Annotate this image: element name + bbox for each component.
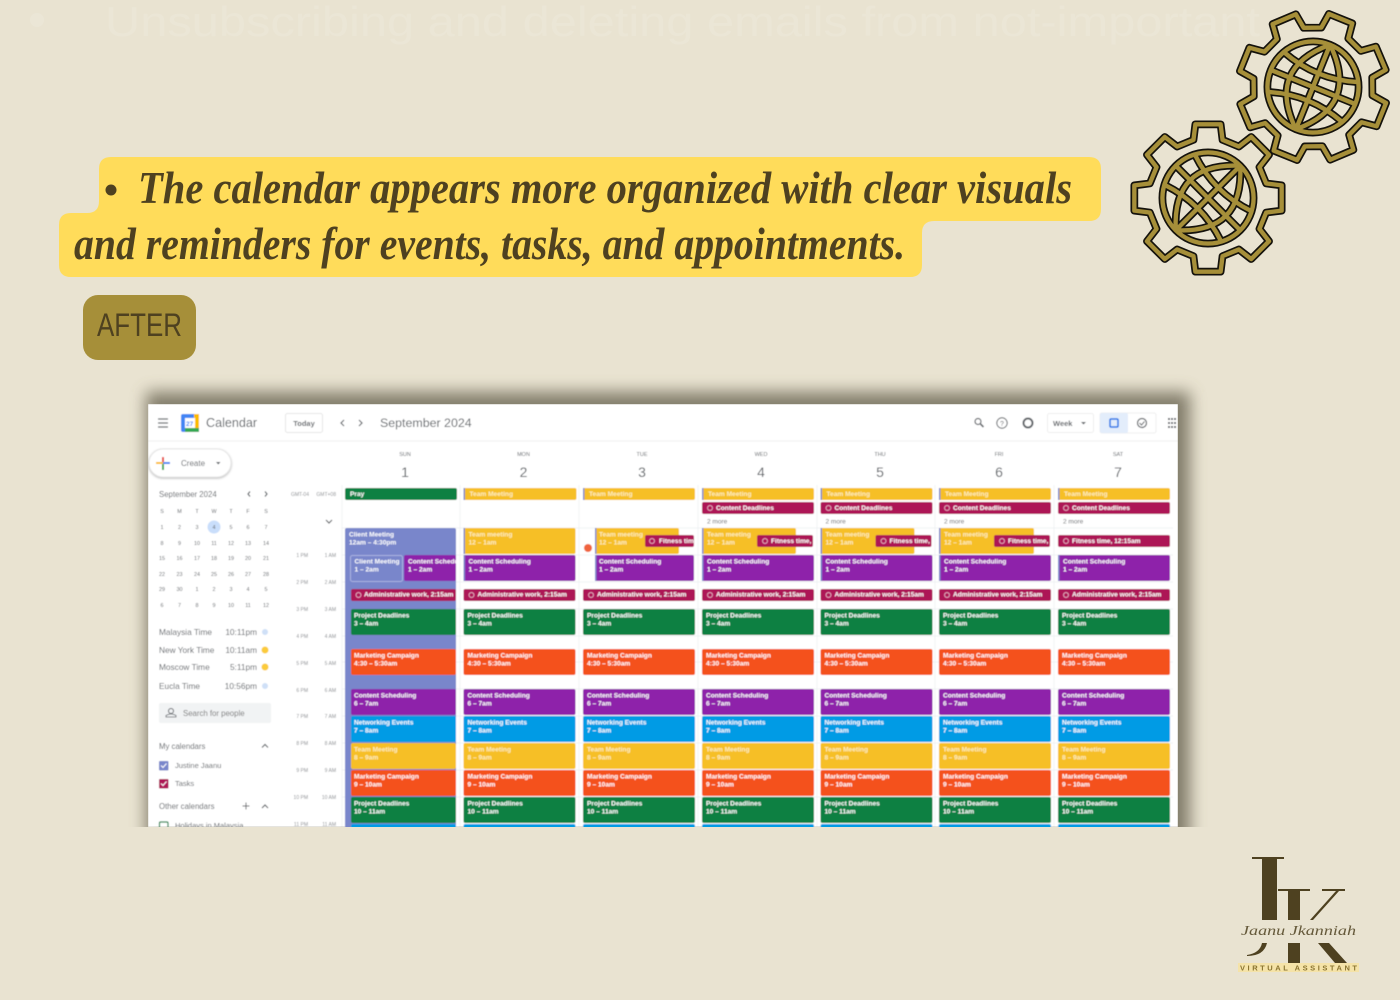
column: Thursday: Fitness time,: [890, 538, 930, 545]
time axis: 3 PM: [296, 607, 308, 613]
column: Wednesday: [702, 488, 814, 830]
AFTER badge: [83, 295, 196, 360]
my calendars list: My calendars: [159, 742, 205, 751]
mini month calendar: S: [160, 509, 164, 515]
search for people: Search for people: [183, 709, 245, 718]
column: Monday: Project Deadlines: [468, 612, 523, 619]
time axis: 6 PM: [296, 688, 308, 694]
mini month calendar: 3: [230, 587, 232, 593]
my calendars list: Holidays in Malaysia: [175, 821, 244, 830]
column: Friday: Team Meeting: [943, 746, 986, 753]
mini month calendar: 11: [211, 541, 217, 547]
column: Sunday: Marketing Campaign: [354, 652, 419, 659]
world clocks: Moscow Time: [159, 662, 210, 672]
column: Wednesday: Marketing Campaign: [706, 773, 771, 780]
column: Thursday: 4:30 – 5:30am: [824, 660, 868, 667]
column: Tuesday: [583, 488, 699, 830]
column: Thursday: Team Meeting: [824, 746, 868, 753]
column: Monday: 8 – 9am: [468, 754, 492, 761]
column: Thursday: 8 – 9am: [824, 754, 849, 761]
column: Monday: Team Meeting: [468, 746, 511, 753]
column: Wednesday: 1 – 2am: [707, 566, 731, 573]
column: Tuesday: 12 – 1am: [599, 539, 627, 546]
time axis: 4 AM: [325, 634, 336, 640]
time axis: 2 PM: [296, 580, 308, 586]
day headers: 3: [638, 464, 646, 480]
my calendars list: Justine Jaanu: [175, 761, 221, 770]
day headers: WED: [755, 452, 767, 458]
column: Saturday: Team Meeting: [1062, 746, 1105, 753]
column: Sunday: 3 – 4am: [354, 620, 378, 627]
mini month calendar: 3: [196, 525, 198, 531]
time axis: 10 AM: [322, 795, 336, 801]
day headers: SAT: [1113, 452, 1124, 458]
column: Tuesday: Networking Events: [587, 719, 647, 726]
world clocks: 10:11pm: [225, 627, 257, 637]
icon: gear globe bottom left: [1104, 94, 1312, 302]
column: Sunday: [345, 488, 470, 830]
mini month calendar: 6: [160, 603, 164, 609]
mini month calendar: 6: [246, 525, 250, 531]
column: Tuesday: Team Meeting: [589, 491, 632, 498]
column: Friday: 12 – 1am: [944, 539, 972, 546]
time axis: 9 AM: [325, 768, 336, 774]
column: Tuesday: Project Deadlines: [587, 800, 643, 807]
my calendars list: Tasks: [175, 779, 194, 788]
column: Thursday: 12 – 1am: [826, 539, 853, 546]
column: Friday: Fitness time,: [1008, 538, 1048, 545]
mini month calendar: 8: [160, 541, 164, 547]
day headers: 6: [995, 464, 1003, 480]
column: Tuesday: 3 – 4am: [587, 620, 611, 627]
column: Saturday: Content Deadlines: [1072, 505, 1130, 512]
mini month calendar: 26: [228, 572, 234, 578]
day headers: [399, 452, 1124, 480]
mini month calendar: 14: [263, 541, 269, 547]
column: Friday: Content Scheduling: [943, 692, 1005, 699]
column: Sunday: Project Deadlines: [354, 612, 410, 619]
column: Thursday: Networking Events: [824, 719, 884, 726]
column: Friday: Team meeting: [944, 531, 988, 538]
column: Wednesday: Content Deadlines: [716, 505, 774, 512]
mini month calendar: 27: [245, 572, 251, 578]
column: Tuesday: Marketing Campaign: [587, 773, 652, 780]
mini month calendar: [159, 490, 269, 609]
logo: [1238, 857, 1359, 972]
column: Sunday: Pray: [350, 491, 365, 498]
mini month calendar: 19: [228, 556, 234, 562]
create button: Create: [181, 459, 206, 468]
day headers: TUE: [636, 452, 648, 458]
mini month calendar: 25: [211, 572, 217, 578]
logo tagline: VIRTUAL ASSISTANT: [1240, 964, 1357, 972]
column: Sunday: 1 – 2am: [354, 566, 379, 573]
time axis: 3 AM: [325, 607, 336, 613]
column: Wednesday: 4:30 – 5:30am: [706, 660, 749, 667]
world clocks: 10:11am: [225, 645, 257, 655]
column: Monday: 6 – 7am: [468, 700, 492, 707]
column: Sunday: Networking Events: [354, 719, 414, 726]
mini month calendar: 10: [228, 603, 234, 609]
world clocks: Malaysia Time: [159, 627, 212, 637]
mini month calendar: 17: [194, 556, 200, 562]
column: Friday: 1 – 2am: [944, 566, 968, 573]
my calendars list: [159, 742, 268, 831]
column: Monday: 3 – 4am: [468, 620, 492, 627]
world clocks: 10:56pm: [225, 681, 257, 691]
column: Sunday: Content Scheduling: [408, 558, 470, 565]
column: Saturday: 10 – 11am: [1062, 808, 1093, 815]
column: Sunday: Marketing Campaign: [354, 773, 419, 780]
logo mirrored monogram: [1247, 943, 1347, 963]
column: Sunday: 6 – 7am: [354, 700, 378, 707]
column: Saturday: Content Scheduling: [1063, 558, 1125, 565]
mini month calendar: 21: [263, 556, 269, 562]
time axis: 5 AM: [325, 661, 336, 667]
column: Tuesday: 1 – 2am: [599, 566, 623, 573]
mini month calendar: M: [177, 509, 182, 515]
column: Saturday: Project Deadlines: [1062, 612, 1118, 619]
column: Wednesday: 10 – 11am: [706, 808, 737, 815]
column: Saturday: [1058, 488, 1170, 830]
screenshot shadow: [146, 392, 1190, 872]
highlighted statement: [59, 157, 1101, 277]
column: Tuesday: 6 – 7am: [587, 700, 611, 707]
mini month calendar: 7: [264, 525, 268, 531]
day headers: THU: [874, 452, 886, 458]
column: Saturday: Administrative work, 2:15am: [1072, 592, 1162, 599]
column: Wednesday: 7 – 8am: [706, 727, 730, 734]
column: Sunday: 9 – 10am: [354, 781, 382, 788]
column: Thursday: 10 – 11am: [824, 808, 856, 815]
column: Wednesday: 12 – 1am: [707, 539, 735, 546]
calendar top bar: 27: [186, 421, 194, 428]
mini month calendar: 2: [178, 525, 181, 531]
column: Friday: 9 – 10am: [943, 781, 971, 788]
column: Wednesday: Team Meeting: [706, 746, 749, 753]
mini month calendar: 22: [159, 572, 165, 578]
column: Thursday: Marketing Campaign: [824, 652, 889, 659]
column: Monday: 12 – 1am: [468, 539, 496, 546]
column: Wednesday: Marketing Campaign: [706, 652, 771, 659]
column: Thursday: Content Deadlines: [834, 505, 893, 512]
column: Wednesday: Project Deadlines: [706, 612, 762, 619]
mini month calendar: 4: [212, 525, 216, 531]
column: Friday: Team Meeting: [945, 491, 988, 498]
column: Tuesday: Team meeting: [599, 531, 643, 538]
column: Friday: Content Scheduling: [944, 558, 1006, 565]
mini month calendar: W: [211, 509, 217, 515]
column: Wednesday: Networking Events: [706, 719, 766, 726]
column: Wednesday: 3 – 4am: [706, 620, 730, 627]
mini month calendar: 12: [263, 603, 269, 609]
column: Saturday: Content Scheduling: [1062, 692, 1124, 699]
column: Tuesday: 4:30 – 5:30am: [587, 660, 630, 667]
calendar top bar: Today: [293, 419, 316, 428]
column: Tuesday: Content Scheduling: [587, 692, 649, 699]
mini month calendar: 20: [245, 556, 251, 562]
time axis: 6 AM: [325, 688, 336, 694]
world clocks: 5:11pm: [230, 662, 257, 672]
column: Saturday: Networking Events: [1062, 719, 1122, 726]
mini month calendar: 7: [178, 603, 181, 609]
mini month calendar: 4: [246, 587, 250, 593]
column: Monday: Networking Events: [468, 719, 527, 726]
mini month calendar: T: [229, 509, 233, 515]
mini month calendar: 1: [160, 525, 164, 531]
time axis: 1 AM: [325, 553, 336, 559]
time axis: GMT+08: [316, 492, 336, 498]
time axis: 9 PM: [296, 768, 308, 774]
column: Wednesday: Fitness time,: [771, 538, 811, 545]
calendar top bar: ?: [1000, 421, 1004, 428]
column: Tuesday: Administrative work, 2:15am: [597, 592, 687, 599]
column: Tuesday: 10 – 11am: [587, 808, 618, 815]
time axis: 1 PM: [296, 553, 308, 559]
day headers: 4: [757, 464, 765, 480]
column: Saturday: 7 – 8am: [1062, 727, 1086, 734]
mini month calendar: 9: [212, 603, 216, 609]
mini month calendar: 28: [263, 572, 269, 578]
column: Tuesday: 9 – 10am: [587, 781, 615, 788]
mini month calendar: F: [246, 509, 250, 515]
mini month calendar: 16: [176, 556, 182, 562]
calendar screenshot: [148, 404, 1178, 831]
column: Monday: Project Deadlines: [468, 800, 523, 807]
mini month calendar: 5: [264, 587, 268, 593]
column: Thursday: 1 – 2am: [826, 566, 850, 573]
column: Saturday: 2 more: [1063, 518, 1084, 526]
time axis: [291, 492, 336, 828]
column: Monday: Content Scheduling: [468, 692, 530, 699]
column: Sunday: Team Meeting: [354, 746, 397, 753]
column: Wednesday: 8 – 9am: [706, 754, 730, 761]
mini month calendar: T: [195, 509, 199, 515]
highlighted statement: and reminders for events, tasks, and appointments.: [74, 219, 905, 269]
mini month calendar: 15: [159, 556, 165, 562]
column: Tuesday: Fitness time,: [659, 538, 699, 545]
time axis: 8 PM: [296, 741, 308, 747]
day headers: SUN: [399, 452, 411, 458]
column: Thursday: Team meeting: [826, 531, 869, 538]
column: Wednesday: 2 more: [707, 518, 728, 526]
calendar top bar: Calendar: [206, 416, 257, 430]
column: Tuesday: Content Scheduling: [599, 558, 661, 565]
mini month calendar: 30: [176, 587, 182, 593]
column: Saturday: Marketing Campaign: [1062, 652, 1127, 659]
column: Sunday: Administrative work, 2:15am: [364, 592, 454, 599]
column: Saturday: 6 – 7am: [1062, 700, 1086, 707]
column: Thursday: Project Deadlines: [824, 612, 880, 619]
mini month calendar: 29: [159, 587, 165, 593]
column: Sunday: 8 – 9am: [354, 754, 378, 761]
column: Saturday: 4:30 – 5:30am: [1062, 660, 1105, 667]
highlighted statement: The calendar appears more organized with clear visuals: [138, 163, 1072, 213]
mini month calendar: 2: [212, 587, 216, 593]
mini month calendar: 10: [194, 541, 200, 547]
calendar top bar: [148, 413, 1178, 441]
column: Wednesday: Project Deadlines: [706, 800, 762, 807]
column: Sunday: Content Scheduling: [354, 692, 416, 699]
day headers: FRI: [995, 452, 1004, 458]
column: Friday: Administrative work, 2:15am: [953, 592, 1043, 599]
column: Monday: 7 – 8am: [468, 727, 492, 734]
column: Tuesday: Team Meeting: [587, 746, 630, 753]
column: Thursday: 2 more: [826, 518, 846, 526]
column: Thursday: 6 – 7am: [824, 700, 849, 707]
mini month calendar: 23: [176, 572, 182, 578]
column: Thursday: Administrative work, 2:15am: [834, 592, 924, 599]
column: Thursday: Content Scheduling: [824, 692, 887, 699]
column: Sunday: 7 – 8am: [354, 727, 378, 734]
column: Saturday: Project Deadlines: [1062, 800, 1118, 807]
column: Monday: 1 – 2am: [468, 566, 493, 573]
column: Monday: Content Scheduling: [468, 558, 531, 565]
column: Sunday: 1 – 2am: [408, 566, 432, 573]
column: Saturday: 1 – 2am: [1063, 566, 1087, 573]
my calendars list: Other calendars: [159, 802, 215, 811]
search for people: [159, 703, 271, 723]
column: Friday: Project Deadlines: [943, 800, 999, 807]
column: Tuesday: Marketing Campaign: [587, 652, 652, 659]
column: Saturday: 3 – 4am: [1062, 620, 1086, 627]
column: Friday: 8 – 9am: [943, 754, 967, 761]
logo monogram K: [1278, 889, 1345, 920]
column: Friday: Marketing Campaign: [943, 773, 1008, 780]
day headers: 2: [520, 464, 528, 480]
mini month calendar: 13: [245, 541, 251, 547]
column: Tuesday: Project Deadlines: [587, 612, 643, 619]
day headers: MON: [517, 452, 530, 458]
column: Thursday: Team Meeting: [826, 491, 870, 498]
day headers: 1: [401, 464, 409, 480]
column: Friday: 4:30 – 5:30am: [943, 660, 986, 667]
column: Tuesday: 8 – 9am: [587, 754, 611, 761]
column: Friday: 7 – 8am: [943, 727, 967, 734]
mini month calendar: S: [264, 509, 268, 515]
column: Thursday: Marketing Campaign: [824, 773, 889, 780]
column: Monday: [464, 488, 576, 830]
column: Friday: Project Deadlines: [943, 612, 999, 619]
mini month calendar: 11: [245, 603, 251, 609]
day headers: 5: [876, 464, 884, 480]
time axis: 7 AM: [325, 714, 336, 720]
create button: [149, 449, 231, 477]
mini month calendar: 24: [194, 572, 200, 578]
mini month calendar: 5: [230, 525, 232, 531]
column: Thursday: [820, 488, 932, 830]
logo monogram I: [1252, 857, 1284, 920]
world clocks: New York Time: [159, 645, 215, 655]
column: Monday: 4:30 – 5:30am: [468, 660, 511, 667]
mini month calendar: September 2024: [159, 490, 217, 499]
time axis: 8 AM: [325, 741, 336, 747]
column: Saturday: Marketing Campaign: [1062, 773, 1127, 780]
time axis: 2 AM: [325, 580, 336, 586]
column: Monday: 10 – 11am: [468, 808, 499, 815]
time axis: 11 PM: [294, 822, 308, 828]
column: Wednesday: Content Scheduling: [707, 558, 769, 565]
mini month calendar: 12: [228, 541, 234, 547]
column: Friday: [939, 488, 1051, 830]
column: Monday: Administrative work, 2:15am: [478, 592, 567, 599]
column: Monday: Team meeting: [468, 531, 512, 538]
column: Thursday: Project Deadlines: [824, 800, 880, 807]
column: Tuesday: 7 – 8am: [587, 727, 611, 734]
column: Sunday: Client Meeting: [349, 531, 394, 538]
time axis: 5 PM: [296, 661, 308, 667]
column: Saturday: 8 – 9am: [1062, 754, 1086, 761]
column: Wednesday: Team meeting: [707, 531, 751, 538]
column: Wednesday: 6 – 7am: [706, 700, 730, 707]
column: Friday: Content Deadlines: [953, 505, 1011, 512]
column: Saturday: 9 – 10am: [1062, 781, 1090, 788]
column: Sunday: Client Meeting: [354, 558, 400, 565]
column: Thursday: 3 – 4am: [824, 620, 849, 627]
mini month calendar: 8: [196, 603, 198, 609]
time axis: 11 AM: [322, 822, 336, 828]
column: Wednesday: Team Meeting: [708, 491, 751, 498]
column: Wednesday: Content Scheduling: [706, 692, 768, 699]
column: Thursday: 9 – 10am: [824, 781, 852, 788]
AFTER badge: AFTER: [97, 307, 182, 343]
column: Monday: Team Meeting: [470, 491, 513, 498]
time axis: GMT-04: [291, 492, 309, 498]
column: Friday: Networking Events: [943, 719, 1003, 726]
column: Saturday: Team Meeting: [1064, 491, 1107, 498]
world clocks: Eucla Time: [159, 681, 200, 691]
mini month calendar: 9: [178, 541, 181, 547]
column: Sunday: 10 – 11am: [354, 808, 385, 815]
column: Saturday: Fitness time, 12:15am: [1072, 538, 1141, 545]
day headers: 7: [1114, 464, 1122, 480]
calendar top bar: Week: [1053, 419, 1073, 428]
column: Monday: 9 – 10am: [468, 781, 495, 788]
column: Friday: Marketing Campaign: [943, 652, 1008, 659]
icon: gear globe top right: [1217, 0, 1400, 183]
column: Friday: 6 – 7am: [943, 700, 967, 707]
column: Sunday: 12am – 4:30pm: [349, 539, 396, 546]
column: Thursday: Content Scheduling: [826, 558, 888, 565]
column: Sunday: Project Deadlines: [354, 800, 410, 807]
calendar top bar: September 2024: [380, 416, 472, 430]
column: Friday: 2 more: [944, 518, 965, 526]
mini month calendar: 1: [196, 587, 198, 593]
time axis: 10 PM: [294, 795, 308, 801]
world clocks: [159, 627, 268, 691]
column: Monday: Marketing Campaign: [468, 652, 532, 659]
column: Friday: 3 – 4am: [943, 620, 967, 627]
time axis: 4 PM: [296, 634, 308, 640]
column: Friday: 10 – 11am: [943, 808, 974, 815]
column: Sunday: 4:30 – 5:30am: [354, 660, 397, 667]
column: Monday: Marketing Campaign: [468, 773, 532, 780]
time axis: 7 PM: [296, 714, 308, 720]
logo signature: Jaanu Jkanniah: [1241, 924, 1356, 939]
column: Thursday: 7 – 8am: [824, 727, 849, 734]
mini month calendar: 18: [211, 556, 217, 562]
column: Wednesday: 9 – 10am: [706, 781, 734, 788]
column: Wednesday: Administrative work, 2:15am: [716, 592, 806, 599]
